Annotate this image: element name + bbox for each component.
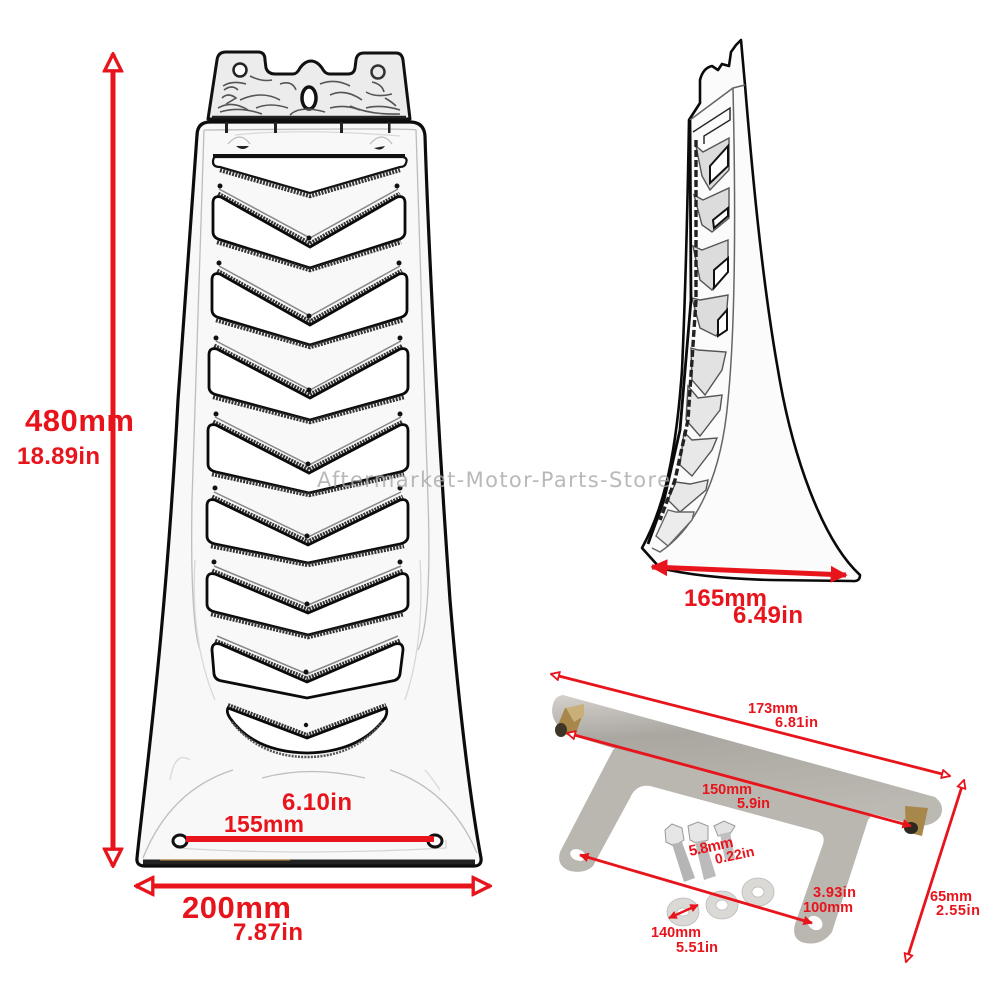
bolts xyxy=(665,821,735,882)
watermark: Aftermarket-Motor-Parts-Store xyxy=(317,468,670,492)
labels: front view dimensions: 6.10in xyxy=(282,789,352,816)
panel: mounting bracket xyxy=(552,695,942,944)
labels: bracket dimensions: 5.51in xyxy=(676,940,718,956)
labels: bracket dimensions: 65mm xyxy=(930,889,972,905)
labels: bracket dimensions: 0.22in xyxy=(713,843,756,867)
arrow: bracket 65mm xyxy=(906,780,964,962)
nuts xyxy=(555,704,928,836)
labels: bracket dimensions: 6.81in xyxy=(775,715,818,731)
side inner frame xyxy=(652,85,745,552)
louvre windows xyxy=(207,156,408,757)
labels: front view dimensions: 18.89in xyxy=(17,443,100,470)
labels: front view dimensions xyxy=(17,403,352,946)
labels: bracket dimensions: 100mm xyxy=(803,900,853,916)
arrow: hole spacing 155mm xyxy=(186,836,434,842)
bottom lip and mounting holes xyxy=(143,835,475,862)
side louvres xyxy=(648,108,730,546)
labels: bracket dimensions: 5.9in xyxy=(737,796,770,812)
bracket plate xyxy=(559,738,880,944)
labels: bracket dimensions xyxy=(651,701,980,956)
inner frame and arcs xyxy=(143,129,477,858)
labels: side view dimensions: 6.49in xyxy=(733,602,803,629)
arrow: bracket 173mm xyxy=(551,674,950,776)
labels: side view dimensions: 165mm xyxy=(684,585,767,612)
labels: side view dimensions xyxy=(684,585,803,629)
labels: front view dimensions: 480mm xyxy=(25,403,134,438)
labels: bracket dimensions: 3.93in xyxy=(813,885,856,901)
labels: bracket dimensions: 5.8mm xyxy=(687,834,735,860)
arrow: washer 140mm xyxy=(669,905,698,918)
arrow: width 200mm xyxy=(136,884,490,888)
labels: front view dimensions: 200mm xyxy=(182,890,291,925)
arrow: side depth 165mm xyxy=(652,567,846,575)
grille plate outline xyxy=(137,122,481,866)
labels: bracket dimensions: 140mm xyxy=(651,925,701,941)
washers xyxy=(667,878,774,926)
labels: bracket dimensions: 2.55in xyxy=(936,903,980,919)
labels: front view dimensions: 155mm xyxy=(224,811,304,837)
labels: bracket dimensions: 173mm xyxy=(748,701,798,717)
labels: front view dimensions: 7.87in xyxy=(233,919,303,946)
arrow: bracket 150mm xyxy=(567,733,911,826)
panel: side view of grille xyxy=(642,40,860,581)
side profile outline xyxy=(642,40,860,581)
labels: bracket dimensions: 150mm xyxy=(702,782,752,798)
arrow: bracket 100mm xyxy=(580,855,812,923)
mounting tab xyxy=(208,52,410,119)
arrow: height 480mm xyxy=(110,54,116,866)
panel: front view of grille xyxy=(137,52,481,866)
